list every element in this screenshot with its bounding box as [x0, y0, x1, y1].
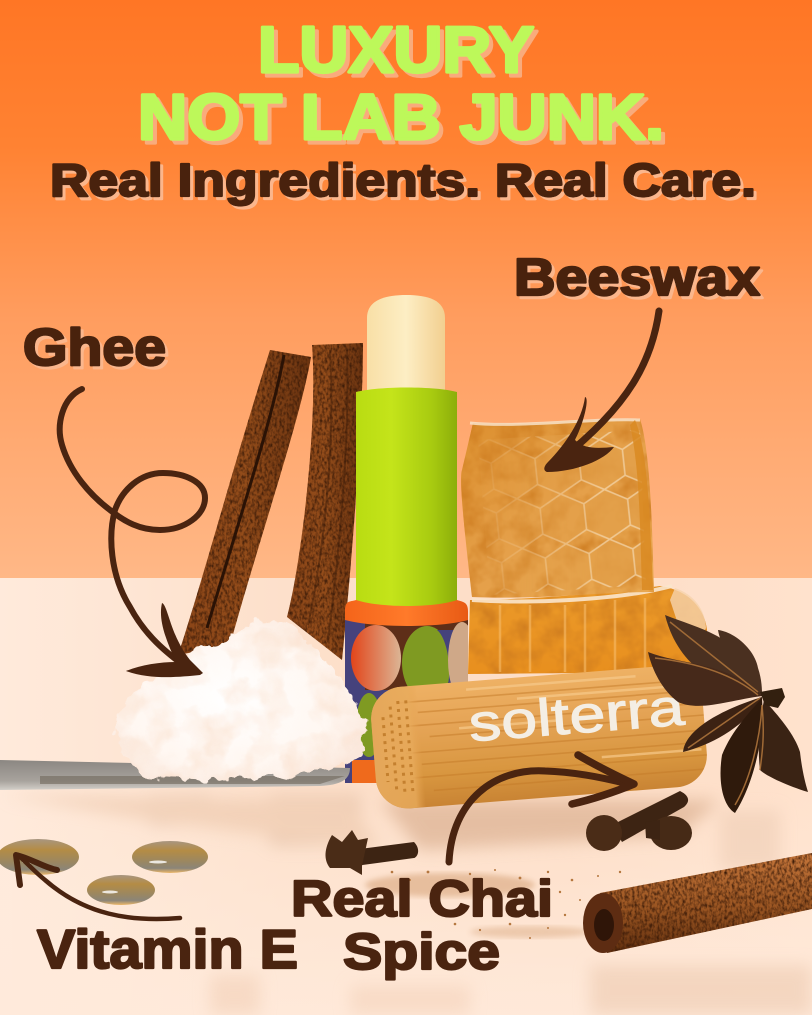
arrow: beeswax [544, 311, 659, 472]
lip balm [345, 295, 476, 783]
bamboo cap [369, 663, 709, 811]
green tube [356, 388, 457, 608]
label: real chai spice [291, 870, 553, 980]
ghee on spatula [0, 619, 366, 790]
table reflections [0, 795, 812, 1015]
upper honey block [461, 419, 654, 598]
title: NOT LAB JUNK. [138, 81, 664, 153]
arrow: vitamin e [16, 855, 180, 919]
cinnamon crease [207, 355, 284, 628]
cloves right [586, 791, 692, 851]
cinnamon roll bottom right [583, 853, 812, 953]
arrow: real chai spice [449, 755, 634, 862]
label: beeswax: Beeswax [514, 249, 760, 307]
honeycomb [461, 419, 707, 674]
balm stick [367, 295, 445, 392]
star anise [648, 615, 808, 813]
lower honey block [468, 586, 707, 674]
title: LUXURY [258, 13, 534, 86]
label: real chai spice: Real Chai [291, 870, 553, 927]
right cinnamon stick [287, 343, 363, 660]
spice dust [365, 869, 621, 939]
droplets [0, 839, 208, 905]
label: vitamin e: Vitamin E [37, 918, 298, 980]
orange ring [345, 600, 468, 626]
clove centre [326, 830, 418, 875]
comb cells [478, 430, 646, 595]
title [138, 13, 664, 153]
left cinnamon pair [178, 350, 311, 655]
label: ghee: Ghee [23, 319, 166, 377]
logo: solterra [467, 679, 686, 753]
arrow: ghee [60, 389, 205, 677]
label: real chai spice: Spice [343, 923, 500, 980]
patterned base [345, 618, 476, 783]
subtitle: Real Ingredients. Real Care. [50, 154, 756, 206]
cinnamon sticks [178, 343, 363, 660]
